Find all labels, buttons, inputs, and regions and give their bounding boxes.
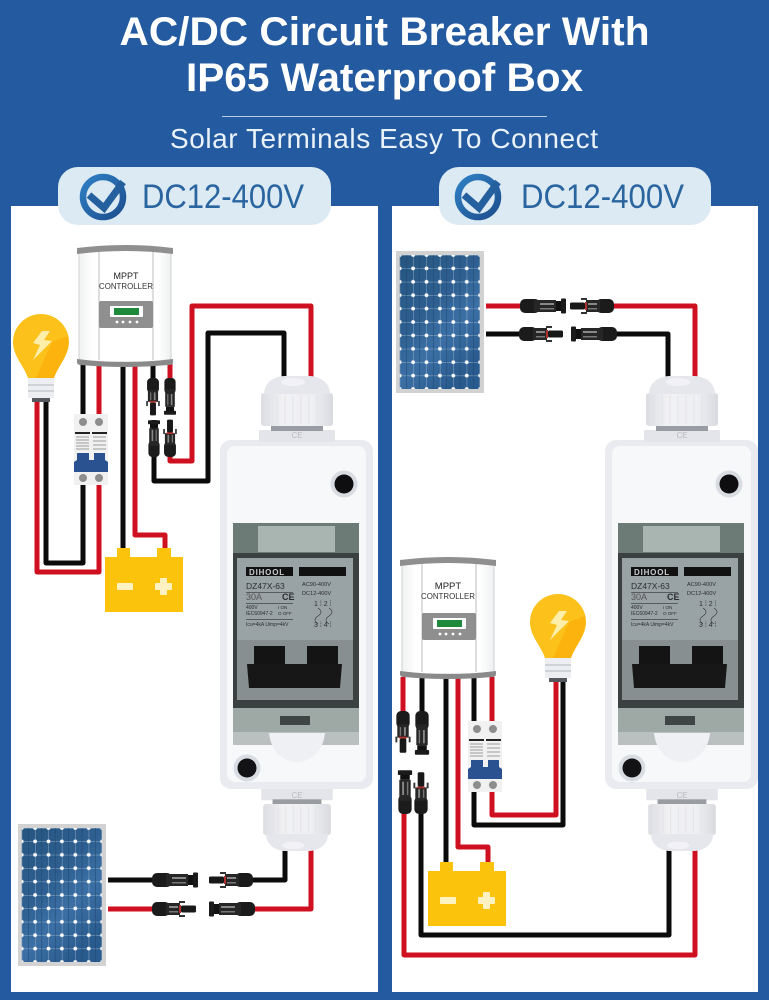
icon: top cable gland: CE bbox=[291, 431, 303, 440]
breaker label text: DC12-400V bbox=[302, 591, 331, 597]
connectors: horizontal MC4 pairs right bbox=[519, 298, 617, 342]
breaker label text right: 30A bbox=[631, 592, 647, 602]
panel: left wiring diagram bbox=[11, 167, 378, 992]
icon: top cable gland right: CE bbox=[676, 431, 688, 440]
breaker label text right: AC90-400V bbox=[687, 582, 716, 588]
breaker label text right: 400V bbox=[631, 605, 643, 611]
breaker label text right: DC12-400V bbox=[687, 591, 716, 597]
icon: light bulb bbox=[13, 314, 69, 402]
breaker label text: DIHOOL bbox=[249, 568, 285, 577]
breaker label text right: DZ47X-63 bbox=[631, 581, 670, 591]
badge: left voltage bbox=[58, 167, 331, 225]
icon: bottom cable gland right bbox=[646, 789, 718, 851]
breaker label text: I ON bbox=[278, 605, 287, 610]
breaker label text: 400V bbox=[246, 605, 258, 611]
breaker label text right: CE bbox=[667, 592, 680, 602]
icon: solar panel right bbox=[396, 251, 484, 393]
icon: mini circuit breaker bbox=[74, 414, 108, 485]
icon: waterproof box bbox=[220, 440, 373, 789]
icon: MPPT controller right: MPPT bbox=[435, 581, 461, 592]
icon: MPPT controller: MPPT bbox=[113, 271, 139, 281]
icon: bottom cable gland: CE bbox=[291, 791, 303, 800]
breaker label text: 30A bbox=[246, 592, 262, 602]
badge: right voltage bbox=[439, 167, 711, 225]
title: IP65 Waterproof Box bbox=[186, 56, 583, 100]
breaker label text: DZ47X-63 bbox=[246, 581, 285, 591]
breaker label text right bbox=[631, 567, 731, 629]
wires: left diagram bbox=[37, 306, 311, 909]
connectors: vertical MC4 pairs right bbox=[395, 711, 429, 814]
panel: right wiring diagram bbox=[392, 167, 758, 992]
connectors: horizontal MC4 pairs bbox=[152, 872, 255, 917]
wires: right diagram bbox=[403, 306, 695, 955]
subtitle: Solar Terminals Easy To Connect bbox=[170, 123, 598, 154]
connectors: vertical MC4 pairs bbox=[146, 378, 177, 457]
breaker label text right: Icu=4kA Uimp=4kV bbox=[631, 622, 674, 628]
badge: left voltage: DC12-400V bbox=[142, 178, 304, 216]
breaker label text: IEC60947-2 bbox=[246, 611, 273, 617]
breaker label text: 3 ⁞ 4 ⁞ bbox=[314, 622, 332, 629]
icon: battery right bbox=[428, 862, 506, 926]
icon: light bulb right bbox=[530, 594, 586, 682]
badge: right voltage: DC12-400V bbox=[521, 178, 684, 216]
breaker label text right: IEC60947-2 bbox=[631, 611, 658, 617]
icon: solar panel bbox=[18, 824, 106, 966]
breaker label text: AC90-400V bbox=[302, 582, 331, 588]
breaker label text right: DIHOOL bbox=[634, 568, 670, 577]
title bbox=[120, 10, 650, 100]
icon: top cable gland right bbox=[644, 376, 720, 442]
breaker label text: CE bbox=[282, 592, 295, 602]
icon: bottom cable gland bbox=[261, 789, 333, 851]
breaker label text right: 1 ⁞ 2 ⁞ bbox=[699, 601, 717, 608]
icon: battery bbox=[105, 548, 183, 612]
icon: MPPT controller: CONTROLLER bbox=[99, 282, 153, 291]
icon: mini circuit breaker right bbox=[468, 721, 502, 792]
breaker label text right: 3 ⁞ 4 ⁞ bbox=[699, 622, 717, 629]
icon: MPPT controller right bbox=[400, 557, 496, 679]
breaker label text: 1 ⁞ 2 ⁞ bbox=[314, 601, 332, 608]
icon: MPPT controller bbox=[77, 245, 173, 367]
breaker label text: Icu=4kA Uimp=4kV bbox=[246, 622, 289, 628]
breaker label text right: O OFF bbox=[663, 611, 677, 616]
breaker label text: O OFF bbox=[278, 611, 292, 616]
breaker label text right: I ON bbox=[663, 605, 672, 610]
title: AC/DC Circuit Breaker With bbox=[120, 10, 650, 54]
icon: waterproof box right bbox=[605, 440, 758, 789]
icon: top cable gland bbox=[259, 376, 335, 442]
breaker label text bbox=[246, 567, 346, 629]
icon: bottom cable gland right: CE bbox=[676, 791, 688, 800]
icon: MPPT controller right: CONTROLLER bbox=[421, 592, 475, 601]
